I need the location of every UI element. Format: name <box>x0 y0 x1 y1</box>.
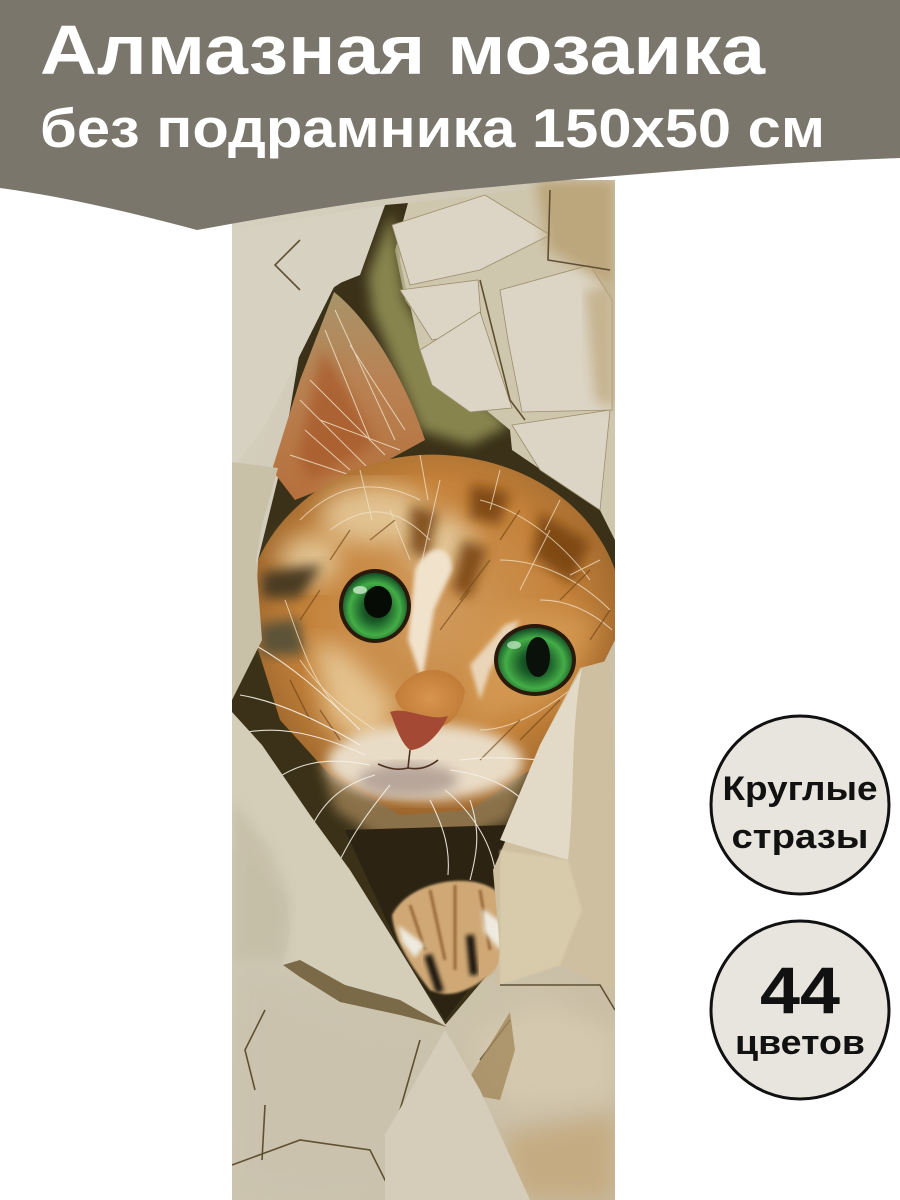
left cheek light fur <box>312 640 395 755</box>
right pupil <box>526 637 550 677</box>
lower wall pale panel <box>385 1030 530 1200</box>
mouth line <box>378 750 438 769</box>
paw toe streaks <box>410 885 490 970</box>
peeled plaster upper right <box>400 180 615 540</box>
banner shape <box>0 0 900 230</box>
kitten ear <box>272 292 425 500</box>
dark fur strands <box>290 510 610 760</box>
flap left shade <box>232 800 290 960</box>
paw light tufts <box>398 908 505 958</box>
left eye rim <box>339 569 411 643</box>
title line 1: Алмазная мозаика <box>40 11 766 89</box>
muzzle white <box>327 724 523 800</box>
cracks <box>232 190 615 1200</box>
badge circle <box>711 716 889 894</box>
left eye highlight <box>353 586 367 594</box>
left eye <box>339 569 411 643</box>
tan wall staining <box>500 1014 615 1200</box>
badge number: 44 <box>760 953 840 1027</box>
ear fur highlights <box>290 310 405 480</box>
right whiskers <box>430 758 545 880</box>
left pupil <box>364 586 392 618</box>
badge text: цветов <box>735 1024 865 1062</box>
torn wall background <box>232 180 615 1200</box>
dark hole behind kitten <box>232 203 615 1025</box>
badge circle <box>711 921 889 1099</box>
badge: round rhinestones <box>711 716 889 894</box>
right flap lower panel <box>500 850 582 985</box>
kitten body <box>345 825 510 1020</box>
pale fur top of head <box>280 485 475 585</box>
kitten paw <box>392 881 506 994</box>
lower wall tear <box>468 1012 515 1100</box>
badge: 44 colours <box>711 921 889 1099</box>
right eye rim <box>494 624 576 696</box>
right eye <box>494 624 576 696</box>
right iris <box>498 628 572 692</box>
paw toe gaps <box>428 935 474 992</box>
left whiskers <box>234 645 390 860</box>
light fur strands <box>285 455 612 730</box>
nose <box>390 711 448 750</box>
tan stain on upper right <box>535 180 615 290</box>
right cheek light fur <box>470 610 600 725</box>
left iris <box>343 573 407 639</box>
dark tabby side stripes <box>258 565 322 655</box>
forehead stripes <box>410 484 590 598</box>
plaster shards <box>392 195 612 510</box>
header banner <box>0 0 900 230</box>
tan stain on right edge <box>585 285 615 410</box>
panel: kitten photo <box>232 180 615 1200</box>
olive glow at top of hole <box>368 212 510 445</box>
fur ruff beneath chin <box>315 760 530 830</box>
flap shadow bottom <box>283 960 447 1027</box>
nose bridge <box>395 670 465 727</box>
badge text line 2: стразы <box>732 818 868 856</box>
plaster chips left <box>232 462 278 700</box>
title line 2: без подрамника 150х50 см <box>40 97 825 159</box>
paw base <box>392 881 506 994</box>
badge text line 1: Круглые <box>722 770 878 808</box>
inner ear shading <box>298 350 375 480</box>
kitten head <box>255 455 615 815</box>
right flap crease <box>500 668 582 860</box>
chin <box>358 763 458 797</box>
right cheek white streak <box>470 620 520 700</box>
peeled plaster upper left <box>232 205 385 465</box>
right eye highlight <box>507 641 521 649</box>
wall flap bottom left <box>232 712 447 1027</box>
wall flap bottom right <box>493 660 615 990</box>
light forehead blaze <box>408 549 452 680</box>
